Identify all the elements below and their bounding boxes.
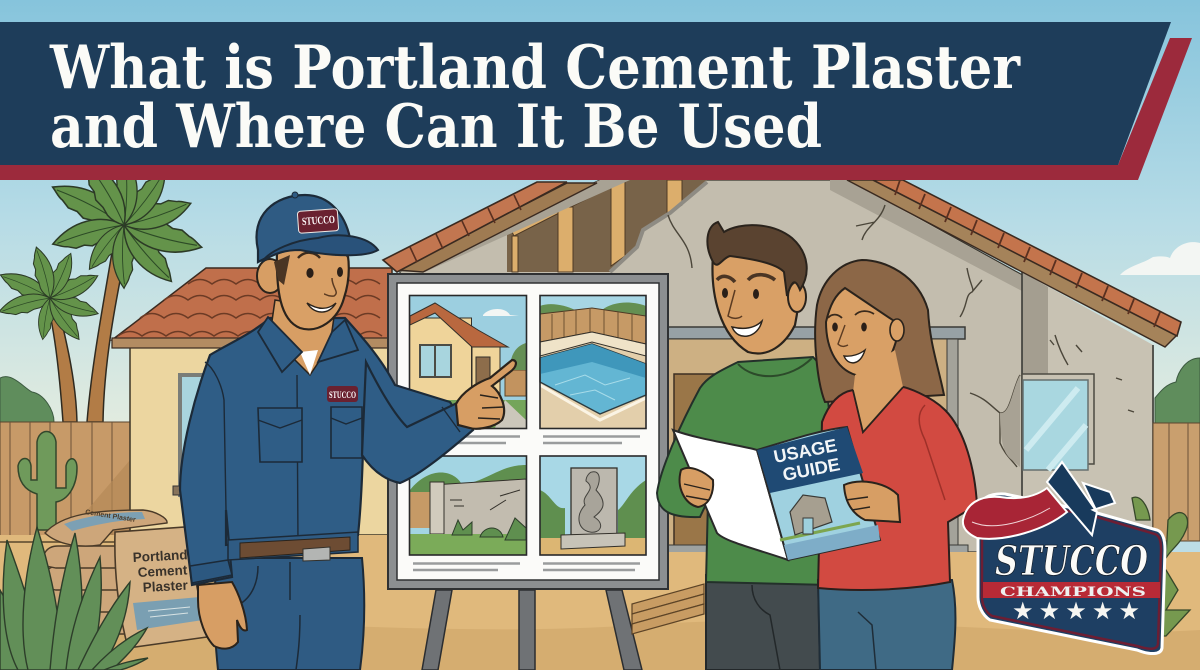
neck and undershirt: [270, 300, 335, 375]
pants: [214, 558, 364, 670]
lumber stack: [632, 584, 704, 634]
dark pants: [706, 575, 820, 670]
usage guide booklet: GUIDE: [781, 454, 842, 485]
background bushes: [0, 358, 1200, 424]
title: [49, 33, 1021, 162]
porch recess: [668, 339, 948, 552]
panel: house exterior: [410, 296, 526, 428]
front bag Portland Cement Plaster: Cement: [137, 562, 188, 580]
panel: swimming pool: [540, 296, 646, 428]
title banner: [0, 22, 1192, 180]
red band: [983, 582, 1160, 598]
front bag Portland Cement Plaster: Portland: [132, 547, 188, 565]
contractor figure: [180, 192, 468, 670]
chest logo: STUCCO: [329, 390, 356, 400]
stucco patch: [1000, 375, 1020, 467]
back house with damaged stucco: [400, 180, 1153, 557]
usage guide booklet: [673, 427, 900, 560]
head and face: [257, 245, 349, 329]
jeans: [818, 580, 955, 670]
right fence: [1153, 423, 1200, 541]
cap: [256, 192, 378, 262]
poster caption lines: [413, 436, 640, 570]
easel legs: [422, 590, 642, 670]
chest logo: [327, 386, 358, 402]
red top: [818, 387, 977, 590]
contractor pointing arm: [362, 360, 516, 483]
title: and Where Can It Be Used: [50, 92, 822, 162]
red ribbon: [0, 38, 1192, 180]
Stucco Champions logo badge: [963, 462, 1165, 654]
back hand: [198, 582, 247, 649]
background sky: [0, 0, 1200, 430]
roof shadow on wall: [400, 180, 1153, 360]
hair: [707, 222, 807, 296]
terracotta roof: [112, 268, 392, 348]
left fence: [0, 422, 130, 542]
panel: concrete sculpture: [540, 456, 646, 555]
left arm and torso: [180, 318, 468, 585]
left cactus: [18, 432, 77, 530]
right fascia: [847, 180, 1177, 347]
right cactus: [1132, 497, 1190, 636]
pockets: [258, 407, 362, 462]
hands: [680, 468, 713, 507]
front left house: [112, 268, 392, 566]
broken stucco edge: [610, 182, 707, 272]
usage guide booklet: USAGE: [772, 435, 839, 467]
title: What is Portland Cement Plaster: [49, 33, 1021, 103]
face: [707, 222, 807, 353]
exposed wood framing: [507, 180, 707, 272]
left fascia: [397, 183, 597, 272]
porch beam: [660, 327, 965, 339]
bag label small: Cement Plaster: [85, 509, 136, 524]
palm trees: [0, 158, 202, 422]
STUCCO wordmark: STUCCO: [995, 537, 1148, 585]
back house roof tiles: [383, 180, 1181, 347]
usage poster board: [388, 274, 668, 589]
side wall: [1022, 272, 1153, 552]
belt: [228, 532, 358, 560]
collar: [258, 317, 358, 372]
window: [1022, 374, 1094, 464]
cement bags: [44, 509, 207, 648]
trowel: [1047, 462, 1115, 535]
agave plant: [0, 527, 148, 670]
woman in red top: [815, 260, 977, 670]
cloud: [1120, 242, 1200, 275]
front bag Portland Cement Plaster: Plaster: [142, 578, 189, 595]
navy banner: [0, 22, 1171, 165]
rating stars: ★★★★★: [1012, 597, 1140, 625]
panel: garden wall: [410, 456, 526, 555]
red swoosh: [963, 488, 1067, 539]
Stucco Champions logo badge: CHAMPIONS: [1000, 585, 1146, 600]
front bag Portland Cement Plaster: [115, 527, 207, 648]
wall cracks: [668, 205, 1134, 467]
long hair: [815, 260, 944, 402]
man in green sweater: [657, 222, 830, 670]
face: [826, 288, 904, 432]
cap: STUCCO: [302, 214, 336, 228]
green sweater: [657, 357, 830, 585]
sandy ground: [0, 535, 1200, 670]
